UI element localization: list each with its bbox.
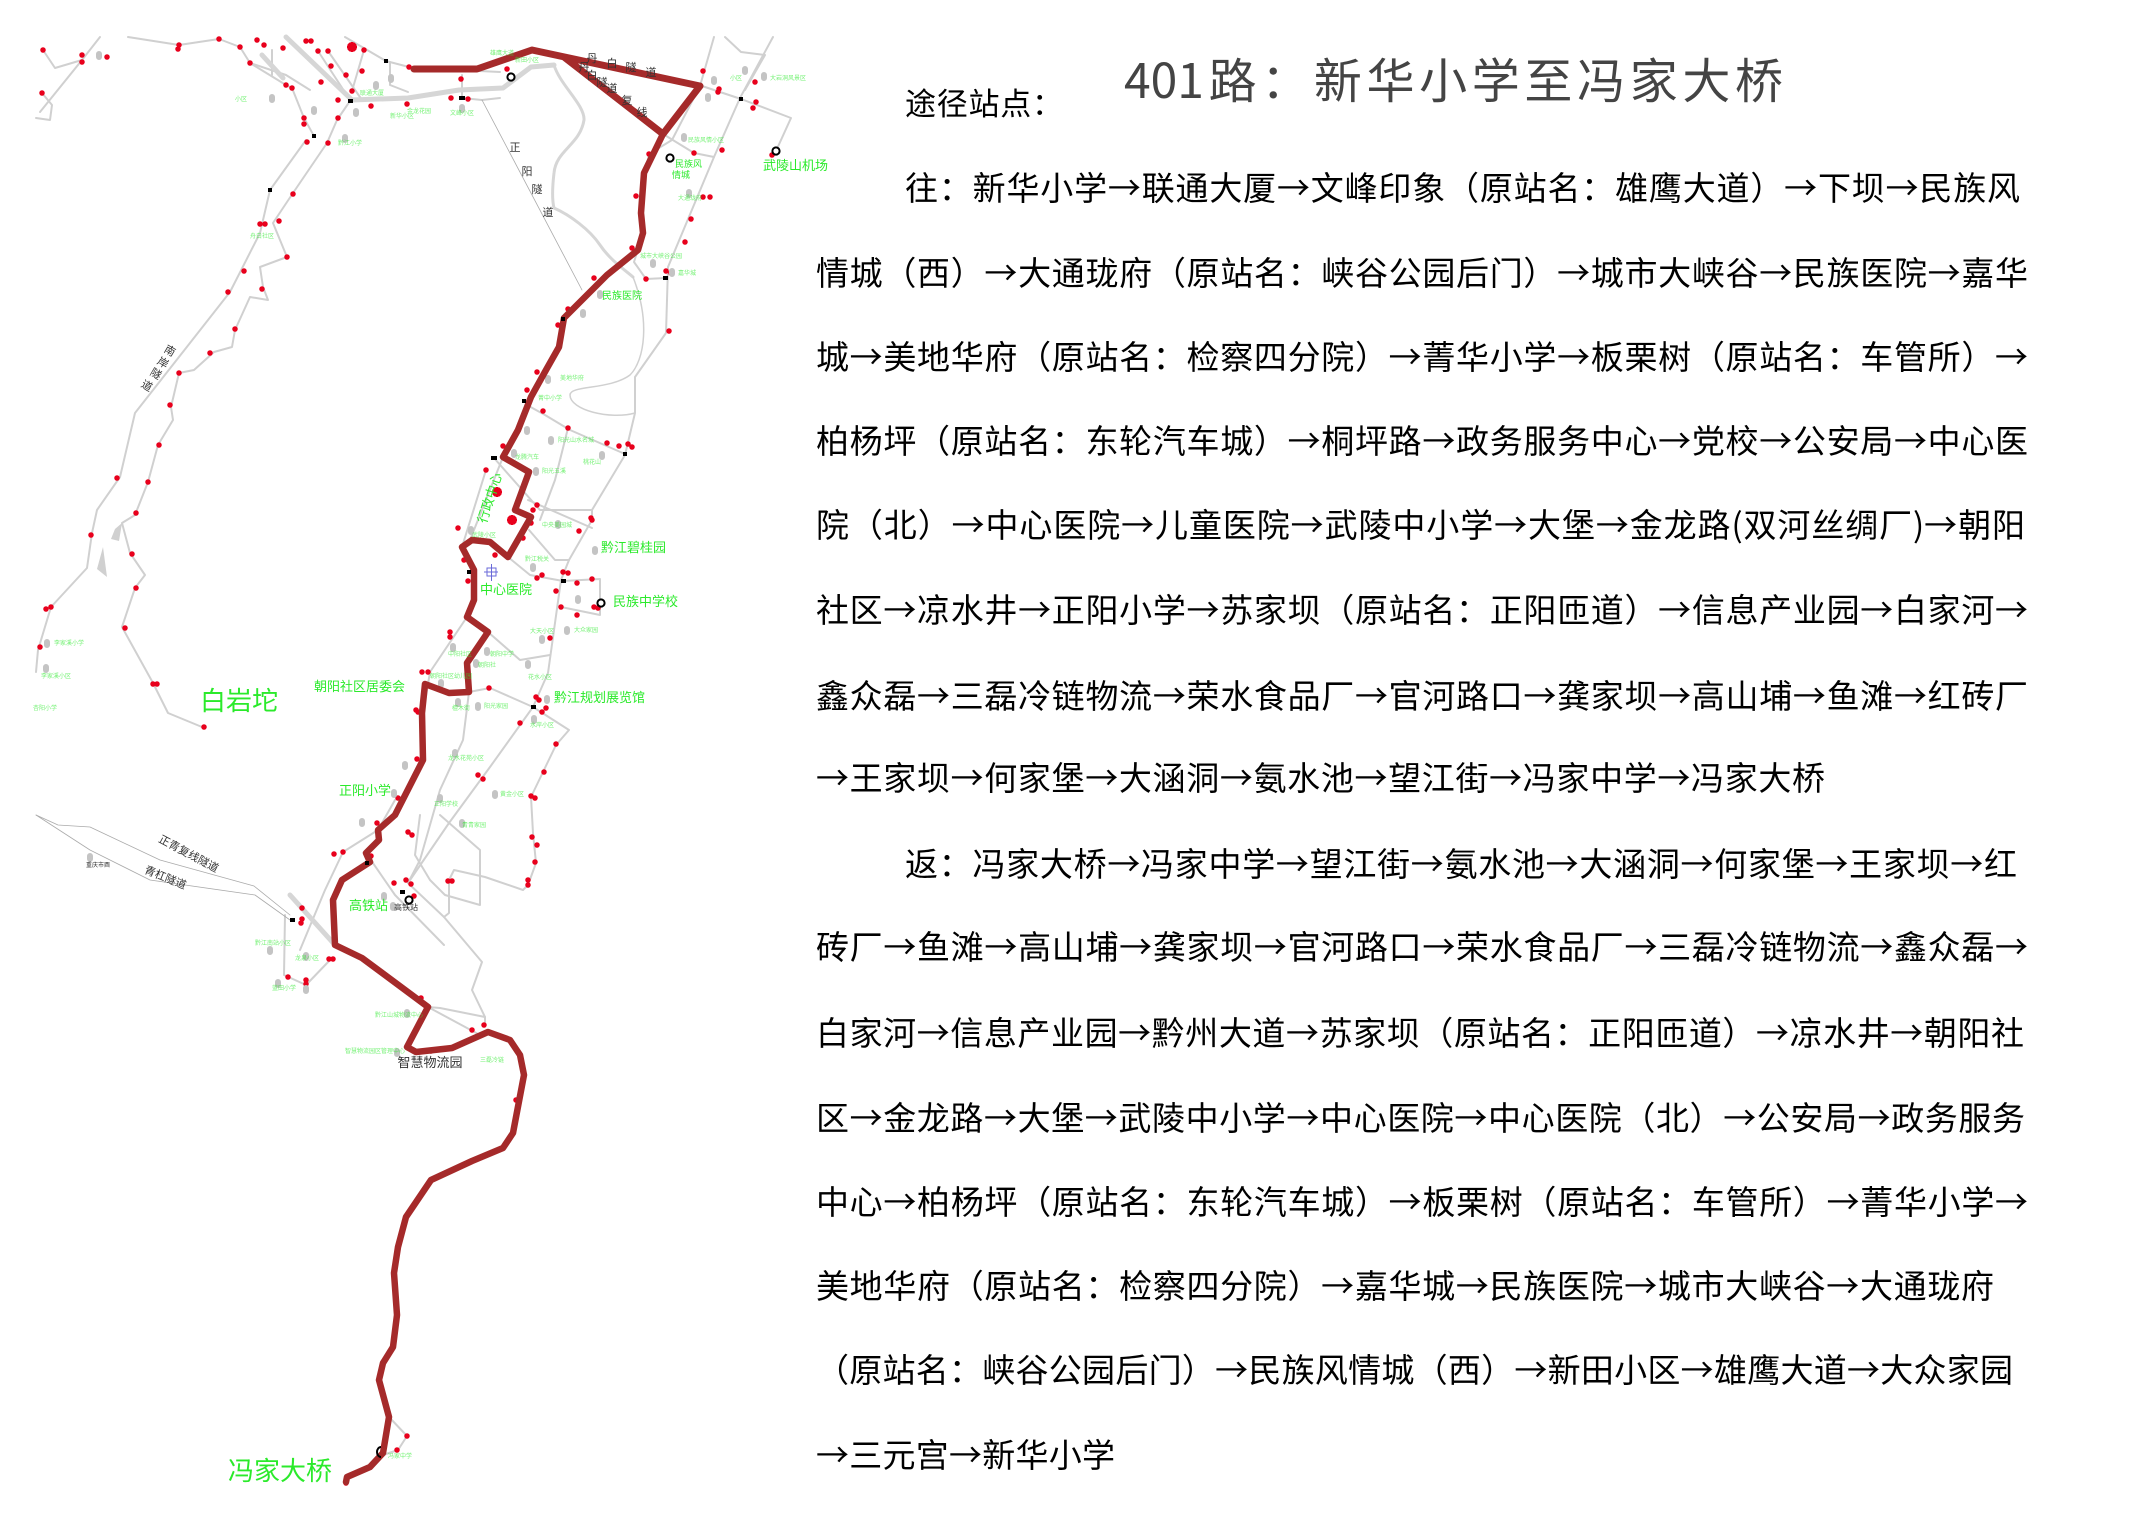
small green labels: 舟白社区 [250, 232, 274, 240]
small green labels: 阳光五溪 [542, 467, 566, 475]
black bus terminals [268, 61, 743, 920]
small green labels: 嘉华城 [678, 269, 696, 277]
major green labels: 冯家大桥 [228, 1456, 332, 1486]
small green labels: 黔江小学 [338, 139, 362, 147]
small green labels: 大天小区 [530, 627, 554, 635]
small green labels: 檀木街 [452, 704, 470, 712]
dark map labels: 重庆市酉 [86, 861, 110, 869]
thick urban roads [262, 37, 554, 945]
dark map labels: 道 [646, 65, 656, 79]
dark map labels: 南 [162, 343, 178, 359]
dark map labels: 道 [542, 205, 554, 219]
dark map labels: 青杠隧道 [142, 863, 189, 892]
small green labels: 桃花山 [583, 458, 601, 466]
reservoir bend [97, 523, 122, 577]
text block: outbound stops: 院（北）→中心医院→儿童医院→武陵中小学→大堡→金龙路(双河丝绸厂)→朝阳 [816, 499, 2025, 547]
major green labels: 朝阳社区居委会 [314, 679, 405, 694]
small green labels: 水岸小区 [530, 721, 554, 729]
text block: return stops: （原站名：峡谷公园后门）→民族风情城（西）→新田小区→雄鹰大道→大众家园 [816, 1344, 2013, 1392]
text block: outbound stops: 社区→凉水井→正阳小学→苏家坝（原站名：正阳匝道）→信息产业园→白家河→ [816, 584, 2028, 632]
major green labels: 白岩坨 [200, 686, 278, 716]
bus route 401 [333, 50, 700, 1482]
dark map labels: 白 [586, 68, 598, 82]
small green labels: 黄金小区 [500, 790, 524, 798]
dark map labels [86, 53, 656, 1070]
text block: outbound stops: 鑫众磊→三磊冷链物流→荣水食品厂→官河路口→龚家坝→高山埔→鱼滩→红砖厂 [816, 670, 2028, 718]
small green labels: 李家溪小学 [54, 639, 84, 647]
small green labels: 黔江税关 [525, 555, 549, 563]
small green labels: 新田小区 [515, 56, 539, 64]
dark map labels: 复 [622, 93, 632, 107]
dark map labels: 正青复线隧道 [156, 832, 221, 875]
dark map labels: 阳 [522, 165, 532, 178]
major green labels: 正阳小学 [339, 783, 391, 798]
text block: return stops: 美地华府（原站名：检察四分院）→嘉华城→民族医院→城市大峡谷→大通珑府 [816, 1260, 1994, 1308]
small green labels: 新华小区 [390, 112, 414, 120]
small green labels: 龙腾汽车 [515, 453, 539, 461]
dark map labels: 隧 [532, 182, 542, 196]
small green labels: 菁中小学 [538, 394, 562, 402]
small green labels [33, 49, 806, 1460]
road network [36, 37, 791, 1455]
major green labels: 高铁站 [349, 898, 388, 913]
dark map labels: 岸 [155, 355, 171, 371]
small green labels: 蓝田小学 [272, 984, 296, 992]
dark map labels: 丹 [586, 53, 598, 65]
small green labels: 阳光山水名城 [558, 436, 594, 444]
small green labels: 美地华府 [560, 374, 584, 382]
tunnel lines [36, 100, 582, 920]
dark map labels: 线 [636, 105, 648, 119]
major green labels: 中心医院 [480, 582, 532, 597]
small green labels: 城市大峡谷公园 [640, 252, 682, 260]
major green labels: 民族风 [675, 158, 702, 169]
small green labels: 大岩洞风景区 [770, 74, 806, 82]
small green labels: 李家溪小区 [41, 672, 71, 680]
text block: return stops: 中心→柏杨坪（原站名：东轮汽车城）→板栗树（原站名：车管所）→菁华小学→ [816, 1176, 2028, 1224]
small green labels: 黔江南站小区 [255, 939, 291, 947]
text block: return stops: 砖厂→鱼滩→高山埔→龚家坝→官河路口→荣水食品厂→三磊冷链物流→鑫众磊→ [816, 921, 2028, 969]
major green labels [200, 158, 828, 1486]
dark map labels: 白 [606, 56, 618, 70]
text block: return stops: →三元宫→新华小学 [816, 1429, 1115, 1477]
major green labels: 行政中心 [475, 471, 505, 525]
dark map labels: 隧 [596, 75, 608, 89]
text block: outbound stops: 往：新华小学→联通大厦→文峰印象（原站名：雄鹰大道）→下坝→民族风 [905, 162, 2020, 210]
dark map labels: 隧 [148, 365, 164, 382]
small green labels: 民族风情小区 [688, 136, 724, 144]
small green labels: 杏阳小学 [33, 704, 57, 712]
icon: hospital [484, 564, 498, 581]
text block: return stops: 白家河→信息产业园→黔州大道→苏家坝（原站名：正阳匝道）→凉水井→朝阳社 [816, 1007, 2024, 1055]
grey place pins [46, 54, 764, 1054]
small green labels: 文峰小区 [450, 109, 474, 117]
small green labels: 朝阳中学 [490, 650, 514, 658]
small green labels: 朝阳社 [478, 661, 496, 669]
major green labels: 黔江碧桂园 [601, 540, 666, 555]
small green labels: 青青家园 [462, 821, 486, 829]
dark map labels: 丹 [578, 62, 590, 74]
major green labels: 黔江规划展览馆 [554, 690, 645, 705]
text block: return stops: 返：冯家大桥→冯家中学→望江街→氨水池→大涵洞→何家堡→王家坝→红 [905, 838, 2017, 886]
small green labels: 正阳学校 [434, 800, 458, 808]
small green labels: 智慧物流园区管理中心 [345, 1047, 405, 1055]
text block: outbound stops: →王家坝→何家堡→大涵洞→氨水池→望江街→冯家中学→冯家大桥 [816, 752, 1825, 800]
major green labels: 武陵山机场 [763, 158, 828, 173]
dark map labels: 智慧物流园 [397, 1055, 463, 1070]
small green labels: 雄鹰大道 [490, 49, 514, 57]
major green labels: 情城 [672, 169, 690, 180]
small green labels: 武陵小区 [472, 531, 496, 539]
small green labels: 黔江山城物流中心 [375, 1011, 423, 1019]
small green labels: 龙水花苑小区 [448, 754, 484, 762]
text block: return stops [816, 838, 2028, 1477]
small green labels: 中阳社区 [448, 650, 472, 658]
major green labels: 民族中学校 [613, 594, 678, 609]
dark map labels: 道 [139, 377, 155, 394]
small green labels: 龙泉小区 [295, 954, 319, 962]
dark map labels: 高铁站 [394, 902, 418, 912]
red stop markers [40, 39, 772, 1483]
small green labels: 中央美园城 [542, 521, 572, 529]
subheading: stops: 途径站点： [905, 79, 1063, 124]
terminal rings [377, 73, 780, 1457]
red star landmarks [347, 42, 517, 525]
small green labels: 金龙花园 [407, 107, 431, 115]
small green labels: 联通大厦 [360, 89, 384, 97]
text block: outbound stops [816, 162, 2028, 800]
small green labels: 三磊冷链 [480, 1056, 504, 1064]
title: 401路：新华小学至冯家大桥 [1124, 42, 1783, 112]
route map [33, 34, 828, 1486]
small green labels: 小区 [235, 95, 247, 103]
text block: outbound stops: 城→美地华府（原站名：检察四分院）→菁华小学→板栗树（原站名：车管所）→ [816, 331, 2028, 379]
small green labels: 冯家中学 [388, 1452, 412, 1460]
dark map labels: 正 [510, 142, 520, 154]
small green labels: 大通珑府 [678, 194, 702, 202]
text block: return stops: 区→金龙路→大堡→武陵中小学→中心医院→中心医院（北）→公安局→政务服务 [816, 1092, 2025, 1140]
dark map labels: 道 [606, 81, 618, 95]
major green labels: 民族医院 [602, 289, 642, 302]
winding mountain road [552, 65, 633, 277]
dark map labels: 隧 [626, 60, 636, 74]
small green labels: 朝阳社区幼儿园 [430, 672, 472, 680]
text block: outbound stops: 柏杨坪（原站名：东轮汽车城）→桐坪路→政务服务中心→党校→公安局→中心医 [816, 415, 2028, 463]
small green labels: 大众家园 [574, 626, 598, 634]
small green labels: 阳光家园 [484, 702, 508, 710]
small green labels: 小区 [730, 74, 742, 82]
small green labels: 花水小区 [528, 673, 552, 681]
text block: outbound stops: 情城（西）→大通珑府（原站名：峡谷公园后门）→城市大峡谷→民族医院→嘉华 [816, 247, 2028, 295]
